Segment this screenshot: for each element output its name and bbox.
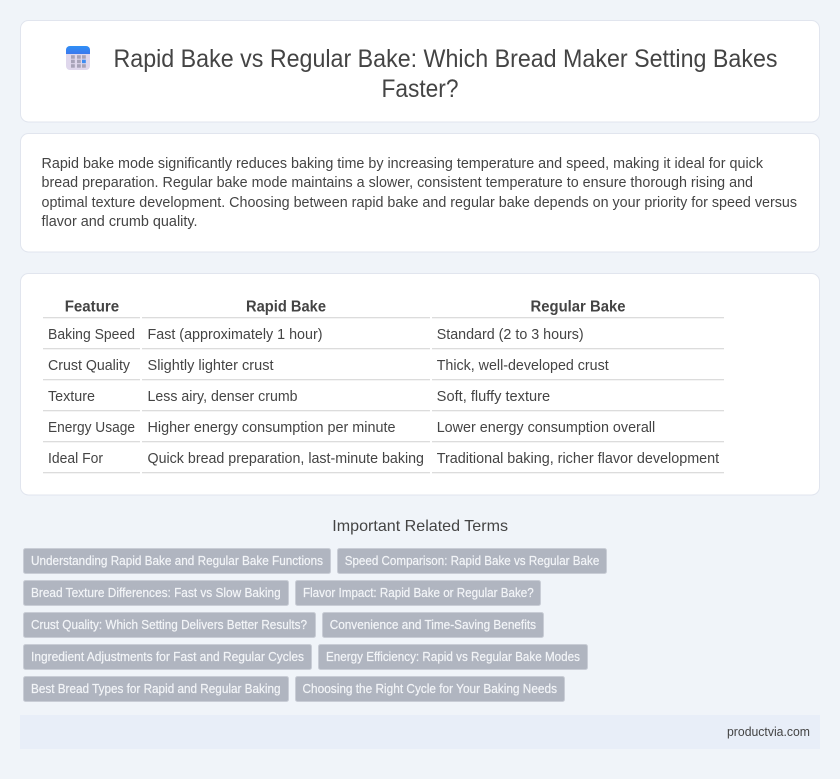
table header: Regular Bake — [530, 298, 626, 316]
tag: Understanding Rapid Bake and Regular Bake Functions — [31, 554, 323, 568]
tag — [296, 580, 540, 606]
tag — [24, 676, 288, 702]
table row: crust quality: Slightly lighter crust — [148, 358, 274, 374]
table header — [43, 298, 724, 318]
panel: comparison table — [20, 274, 820, 495]
table row: ideal for: Quick bread preparation, last-minute baking — [148, 451, 424, 467]
table row: baking speed: Standard (2 to 3 hours) — [437, 327, 584, 343]
title: Faster? — [382, 75, 458, 103]
related terms tags — [24, 548, 606, 702]
tag: Flavor Impact: Rapid Bake or Regular Bake? — [303, 586, 534, 600]
title: Rapid Bake vs Regular Bake: Which Bread Maker Setting Bakes — [114, 45, 778, 73]
table row: ideal for — [43, 451, 724, 473]
table row: texture: Less airy, denser crumb — [148, 389, 298, 405]
text block: description: optimal texture development. Choosing between rapid bake and regular bake depends on your priority for speed versus — [42, 195, 797, 211]
table row: ideal for: Traditional baking, richer flavor development — [437, 451, 719, 467]
tag: Speed Comparison: Rapid Bake vs Regular Bake — [345, 554, 599, 568]
table header: Feature — [65, 298, 119, 316]
text block: description: flavor and crumb quality. — [42, 214, 198, 230]
table row: energy usage: Higher energy consumption per minute — [148, 420, 396, 436]
text block: description: Rapid bake mode significantly reduces baking time by increasing temperature and speed, making it ideal for quick — [42, 156, 764, 172]
tag — [322, 612, 544, 638]
tag: Best Bread Types for Rapid and Regular Baking — [31, 682, 281, 696]
tag — [24, 644, 312, 670]
title — [114, 45, 778, 103]
footer — [20, 715, 820, 749]
panel: header — [20, 20, 820, 122]
table row: energy usage — [43, 420, 724, 442]
icon: calendar — [66, 46, 90, 70]
heading: related terms: Important Related Terms — [332, 518, 508, 535]
tag — [24, 548, 330, 574]
table row: ideal for: Ideal For — [48, 451, 103, 467]
tag: Bread Texture Differences: Fast vs Slow Baking — [31, 586, 281, 600]
tag: Energy Efficiency: Rapid vs Regular Bake Modes — [326, 650, 580, 664]
table header: Rapid Bake — [246, 298, 326, 316]
tag — [24, 612, 316, 638]
tag: Ingredient Adjustments for Fast and Regular Cycles — [31, 650, 304, 664]
table row: baking speed: Baking Speed — [48, 327, 135, 343]
tag — [318, 644, 588, 670]
table row: energy usage: Energy Usage — [48, 420, 135, 436]
footer: productvia.com — [727, 725, 810, 739]
table row: crust quality: Crust Quality — [48, 358, 131, 374]
table row: crust quality: Thick, well-developed crust — [437, 358, 609, 374]
tag: Crust Quality: Which Setting Delivers Better Results? — [31, 618, 307, 632]
tag — [338, 548, 606, 574]
tag — [24, 580, 288, 606]
text block: description — [42, 156, 797, 230]
text block: description: bread preparation. Regular bake mode maintains a slower, consistent temperature to ensure thorough rising and — [42, 175, 753, 191]
panel: description — [20, 134, 820, 252]
table row: baking speed — [43, 327, 724, 349]
table row: texture — [43, 389, 724, 411]
table row: texture: Texture — [48, 389, 95, 405]
table row: crust quality — [43, 358, 724, 380]
tag: Choosing the Right Cycle for Your Baking Needs — [302, 682, 557, 696]
table row: baking speed: Fast (approximately 1 hour) — [148, 327, 322, 343]
tag — [296, 676, 564, 702]
tag: Convenience and Time-Saving Benefits — [330, 618, 536, 632]
table row: texture: Soft, fluffy texture — [437, 389, 550, 405]
table row: energy usage: Lower energy consumption overall — [437, 420, 655, 436]
